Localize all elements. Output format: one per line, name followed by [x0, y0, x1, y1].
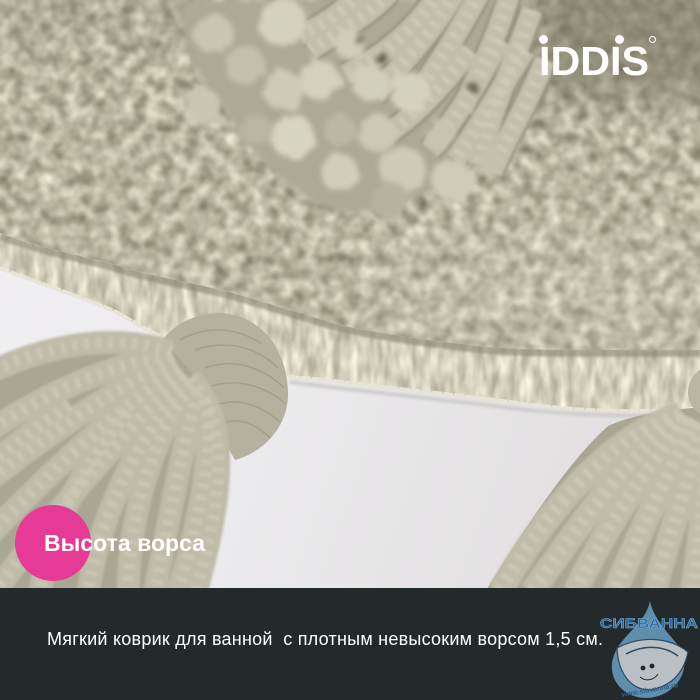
photo: bath rug with shag pile: [0, 0, 700, 350]
photo: bottom-right tassel: [487, 366, 700, 592]
website address: www.sibvanna.ru: [620, 682, 679, 699]
photo: bottom-left tassel strands: [0, 335, 229, 592]
right tassel silhouette: [487, 408, 700, 589]
left tassel silhouette: [0, 335, 229, 589]
brand name: СИБВАННА: [600, 615, 698, 631]
pink circle accent: [15, 505, 91, 581]
photo: top tassel pom-pom: [182, 0, 545, 220]
pom-pom body: [182, 0, 530, 212]
icon: water drop: [612, 601, 684, 698]
heading: pile height label: Высота ворса: [44, 530, 205, 556]
icon: smiling bathtub: [617, 639, 688, 690]
photo: rug lace trim: [0, 268, 700, 411]
footer description text: Мягкий коврик для ванной с плотным невысоким ворсом 1,5 см.: [47, 629, 603, 649]
watermark logo: Sibvanna drop with bathtub: [600, 601, 698, 699]
logo: IDDIS brand: IDDIS: [539, 38, 649, 84]
footer dark band: [0, 588, 700, 700]
right tassel knot: [688, 366, 700, 418]
photo: rug piping edge: [0, 233, 700, 412]
fluffy tufts of pom-pom: [185, 0, 503, 220]
photo: tassel wrapped knob: [160, 313, 288, 460]
photo: shadow under rug edge: [290, 382, 700, 416]
